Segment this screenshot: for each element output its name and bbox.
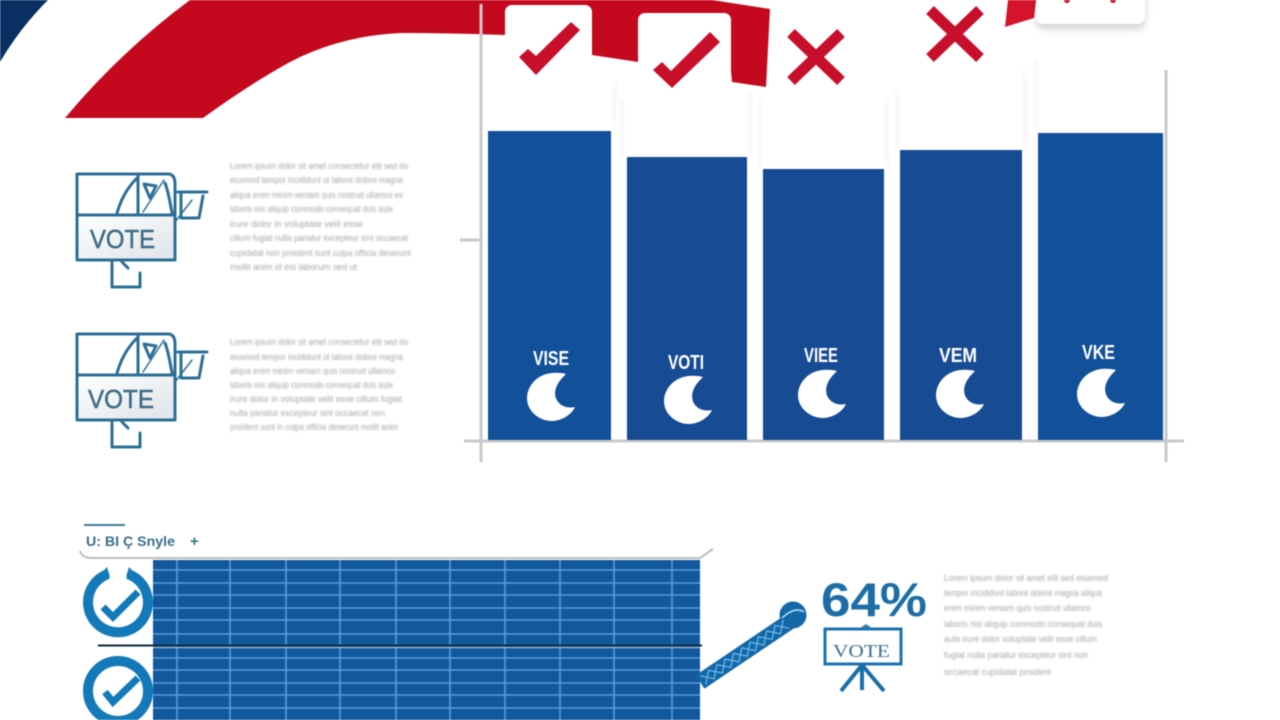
card: check two <box>638 13 731 103</box>
icon: cross one <box>791 33 841 81</box>
table heading: U: BI Ç Snyle <box>86 533 175 549</box>
table heading <box>84 525 199 550</box>
icon: vote sign: VOTE <box>833 641 890 661</box>
icon: vote sign <box>825 624 901 691</box>
text block three: Lorem ipsum dolor sit amet elit sed eiusmod <box>944 573 1108 583</box>
bar 1: VISE <box>533 348 569 370</box>
text block three: aute irure dolor voluptate velit esse cillum <box>944 634 1097 644</box>
text block one: mollit anim id est laborum sed ut <box>230 262 357 272</box>
text block two <box>230 337 408 432</box>
bar 2 <box>627 157 747 440</box>
corner accent <box>0 0 48 62</box>
icon: circular check one <box>88 567 148 632</box>
text block three: enim minim veniam quis nostrud ullamco <box>944 603 1091 613</box>
text block two: laboris nisi aliquip commodo consequat duis aute <box>230 380 393 390</box>
text block two: eiusmod tempor incididunt ut labore dolore magna <box>230 352 403 362</box>
red ribbon end <box>1005 0 1036 27</box>
bar 1 <box>488 131 611 440</box>
arrow: connector pipe <box>700 602 806 684</box>
text block two: irure dolor in voluptate velit esse cillum fugiat <box>230 394 402 404</box>
text block one: eiusmod tempor incididunt ut labore dolore magna <box>230 175 403 185</box>
text block three: fugiat nulla pariatur excepteur sint non <box>944 650 1088 660</box>
card: partial check top right <box>1036 0 1145 24</box>
vote cards column outlines <box>615 60 1036 168</box>
text block two: Lorem ipsum dolor sit amet consectetur elit sed do <box>230 337 408 347</box>
icon: cross two <box>930 10 980 58</box>
text block one: laboris nisi aliquip commodo consequat duis aute <box>230 204 393 214</box>
text block two: aliqua enim minim veniam quis nostrud ullamco <box>230 366 395 376</box>
bar 5: VKE <box>1082 342 1115 364</box>
bar 3: VIEE <box>804 345 838 367</box>
text block one: cillum fugiat nulla pariatur excepteur sint occaecat <box>230 233 408 243</box>
text block three: occaecat cupidatat proident <box>944 667 1051 677</box>
bar 4: VEM <box>939 345 977 367</box>
icon: ballot box two <box>77 334 207 447</box>
chart axes <box>460 4 1184 462</box>
text block three: tempor incididunt labore dolore magna aliqua <box>944 588 1102 598</box>
red ribbon banner <box>65 0 770 118</box>
icon: ballot box one: VOTE <box>90 224 155 254</box>
bar 4 <box>900 150 1022 440</box>
text block two: nulla pariatur excepteur sint occaecat non <box>230 408 385 418</box>
text block three <box>944 573 1108 677</box>
bar 2: VOTI <box>668 352 704 374</box>
bar chart <box>488 131 1163 440</box>
text block one: irure dolor in voluptate velit esse <box>230 219 363 229</box>
card: check one <box>505 5 592 105</box>
text block one: Lorem ipsum dolor sit amet consectetur elit sed do <box>230 161 408 171</box>
icon: circular check two <box>88 661 148 720</box>
statistic: 64 percent: 64% <box>821 573 927 626</box>
text block one: aliqua enim minim veniam quis nostrud ullamco ex <box>230 190 403 200</box>
blue data table <box>98 560 702 720</box>
bar 3 <box>763 169 884 440</box>
text block two: proident sunt in culpa officia deserunt mollit anim <box>230 422 398 432</box>
table rule <box>80 549 713 558</box>
bar 5 <box>1038 133 1163 440</box>
text block three: laboris nisi aliquip commodo consequat duis <box>944 619 1102 629</box>
text block one <box>230 161 411 272</box>
text block one: cupidatat non proident sunt culpa officia deserunt <box>230 248 411 258</box>
table heading: + <box>190 533 199 550</box>
icon: ballot box two: VOTE <box>88 384 154 414</box>
icon: ballot box one <box>77 174 207 287</box>
